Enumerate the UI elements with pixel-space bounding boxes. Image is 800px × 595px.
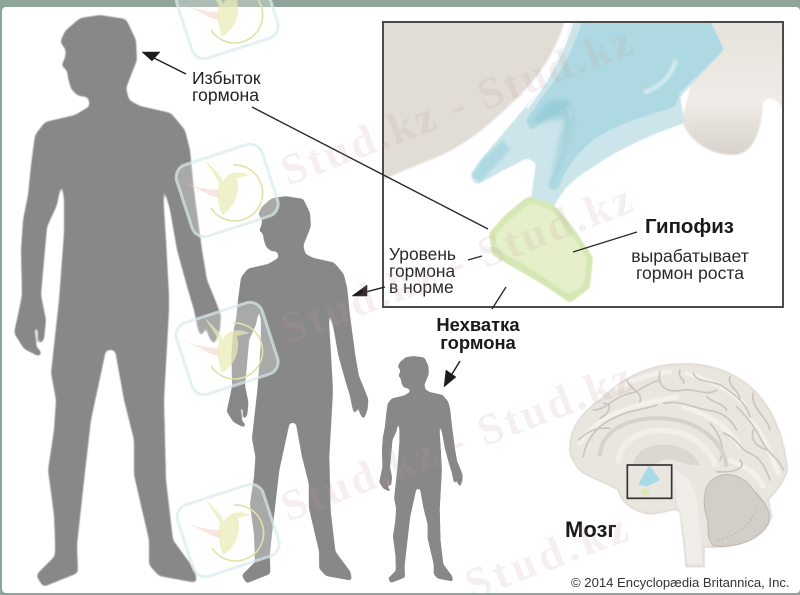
panel: pituitary close-up inset bbox=[382, 21, 784, 308]
text: produces growth hormone: вырабатывает bbox=[631, 246, 749, 266]
arrow: to small figure bbox=[444, 361, 460, 387]
watermark: logo 1 bbox=[173, 0, 282, 62]
label: hormone deficiency: гормона bbox=[440, 332, 517, 353]
watermark: logo 3 bbox=[173, 299, 282, 398]
label: excess hormone: Избыток bbox=[192, 68, 261, 88]
watermark: logo 2 bbox=[173, 141, 282, 240]
darker shade in stalk bbox=[533, 99, 574, 177]
location box bbox=[627, 465, 672, 498]
credit: © 2014 Encyclopædia Britannica, Inc. bbox=[571, 575, 790, 590]
watermark: text row 1: Stud.kz - Stud.kz bbox=[274, 16, 639, 195]
brainstem bbox=[673, 470, 703, 563]
watermark: text row 2: Stud.kz - Stud.kz bbox=[274, 174, 639, 353]
white cleft beside stalk bbox=[527, 20, 573, 108]
corpus callosum bbox=[600, 418, 727, 467]
figure: normal hormone, medium silhouette bbox=[227, 196, 368, 583]
figure: hormone deficiency, small silhouette bbox=[379, 356, 463, 583]
illustration: brain cross-section bbox=[570, 364, 787, 567]
pituitary gland bbox=[489, 196, 593, 303]
pituitary stalk left branch tip bbox=[472, 140, 510, 182]
brain folds bbox=[578, 370, 783, 480]
figure: excess hormone, tall silhouette bbox=[14, 15, 221, 587]
leader line: normal level to gland bbox=[468, 256, 482, 260]
brain tissue, upper left bbox=[384, 23, 564, 180]
label: hormone deficiency: Нехватка bbox=[436, 314, 520, 335]
text: produces growth hormone: гормон роста bbox=[636, 263, 744, 283]
label: excess hormone: гормона bbox=[192, 85, 259, 105]
cerebellum bbox=[704, 475, 769, 546]
leader line: deficiency to gland bbox=[492, 287, 506, 309]
hypothalamus highlight in blue bbox=[638, 465, 660, 487]
brain gyri highlights bbox=[580, 372, 778, 487]
watermark: logo 4 bbox=[174, 481, 283, 580]
label: pituitary gland: Гипофиз bbox=[645, 216, 734, 238]
brain outline bbox=[570, 364, 787, 567]
label: normal hormone level: Уровень bbox=[389, 244, 456, 264]
label: normal hormone level: гормона bbox=[389, 261, 456, 281]
cerebellum texture bbox=[717, 507, 757, 540]
inset border bbox=[383, 22, 783, 307]
gland highlight in green bbox=[640, 489, 650, 497]
leader line: gland label bbox=[573, 232, 637, 252]
arrow: to medium figure bbox=[352, 285, 385, 296]
leader line: excess hormone to gland bbox=[252, 107, 488, 229]
label: normal hormone level: в норме bbox=[389, 277, 454, 297]
optic chiasm tissue, upper right bbox=[683, 23, 782, 156]
watermark: text row 3: Stud.kz - Stud.kz bbox=[274, 352, 639, 531]
stalk highlight bbox=[644, 60, 676, 92]
arrow: to tall figure bbox=[142, 52, 186, 74]
label: brain: Мозг bbox=[565, 517, 617, 542]
pituitary stalk, light blue bbox=[470, 10, 724, 210]
pituitary stalk, darker blue bbox=[526, 10, 724, 191]
